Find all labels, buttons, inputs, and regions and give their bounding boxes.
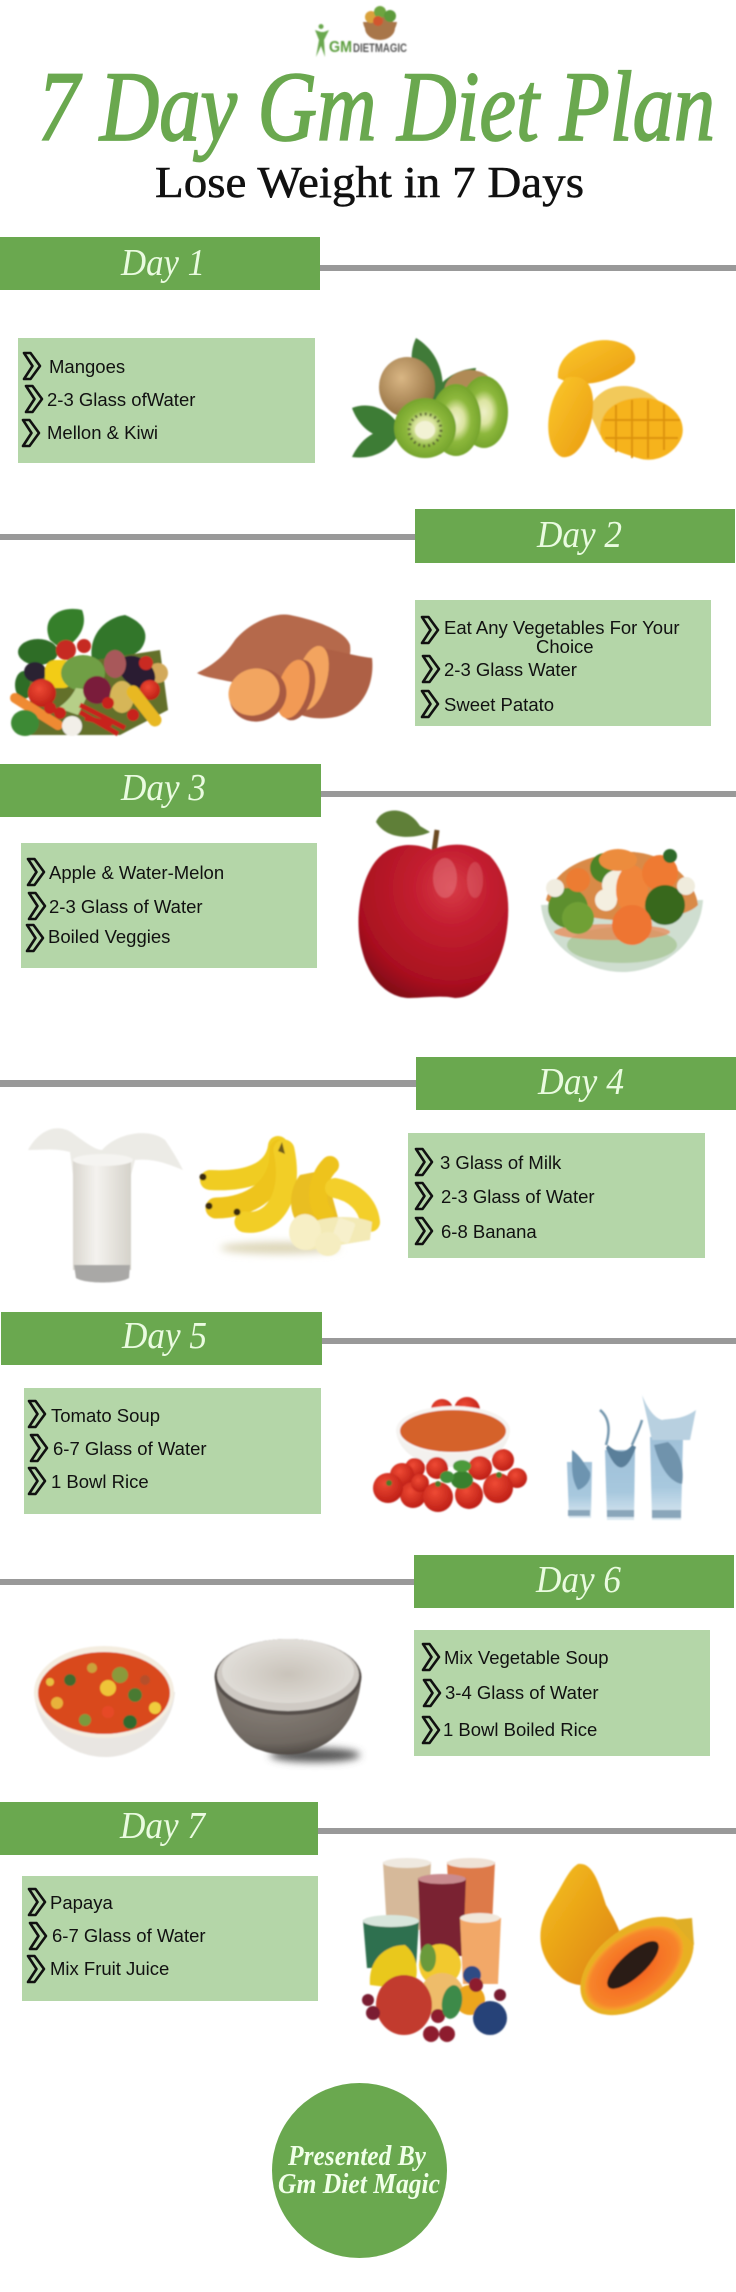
- icon: vegetable soup: [34, 1646, 175, 1757]
- panel: day 7 list: Mix Fruit Juice: [50, 1958, 169, 1979]
- section: day 4: [0, 1057, 736, 1282]
- panel: day 1 list: Mellon & Kiwi: [47, 422, 158, 443]
- day 6 banner: Day 6: [535, 1559, 621, 1601]
- logo wordmark: GM: [329, 39, 352, 56]
- logo: [315, 6, 407, 57]
- subtitle: Lose Weight in 7 Days: [155, 158, 584, 207]
- panel: day 5 list: [24, 1388, 321, 1514]
- icon: apple: [358, 810, 508, 998]
- day 4 banner: [416, 1057, 736, 1110]
- divider line: [320, 791, 736, 797]
- panel: day 3 list: Apple & Water-Melon: [49, 862, 224, 883]
- icon: bananas: [200, 1142, 372, 1256]
- panel: day 5 list: 1 Bowl Rice: [51, 1471, 149, 1492]
- day 2 banner: Day 2: [536, 514, 622, 556]
- icon: rice bowl: [214, 1639, 362, 1762]
- panel: day 4 list: 6-8 Banana: [441, 1221, 537, 1242]
- icon: vegetables: [11, 609, 168, 736]
- panel: day 6 list: 3-4 Glass of Water: [445, 1682, 599, 1703]
- panel: day 4 list: 3 Glass of Milk: [440, 1152, 562, 1173]
- section: day 5: [1, 1312, 736, 1520]
- icon: tomato soup: [373, 1397, 527, 1512]
- divider line: [320, 265, 736, 271]
- panel: day 3 list: [21, 843, 317, 968]
- closing badge: [272, 2083, 447, 2258]
- icon: milk glass: [28, 1128, 183, 1282]
- icon: sweet potato: [197, 614, 372, 731]
- divider line: [0, 1080, 416, 1087]
- icon: fruit basket: [363, 6, 397, 40]
- icon: papaya: [540, 1864, 712, 2035]
- panel: day 1 list: [18, 338, 315, 463]
- day 1 banner: [0, 237, 320, 290]
- panel: day 7 list: [22, 1876, 318, 2001]
- panel: day 2 list: [415, 600, 711, 726]
- badge text: Presented By: [287, 2141, 427, 2172]
- panel: day 3 list: Boiled Veggies: [48, 926, 170, 947]
- panel: day 5 list: 6-7 Glass of Water: [53, 1438, 207, 1459]
- badge text: Gm Diet Magic: [278, 2169, 441, 2200]
- icon: vegetable bowl: [541, 849, 703, 972]
- day 5 banner: Day 5: [121, 1315, 207, 1357]
- logo wordmark: [329, 39, 407, 56]
- divider line: [0, 534, 415, 540]
- panel: day 3 list: 2-3 Glass of Water: [49, 896, 203, 917]
- day 6 banner: [414, 1555, 734, 1608]
- panel: day 4 list: 2-3 Glass of Water: [441, 1186, 595, 1207]
- section: day 7: [0, 1802, 736, 2042]
- panel: day 4 list: [408, 1133, 705, 1258]
- section: day 3: [0, 764, 736, 998]
- day 3 banner: Day 3: [120, 767, 206, 809]
- section: day 1: [0, 237, 736, 463]
- section: day 6: [0, 1555, 734, 1762]
- section: day 2: [0, 509, 735, 736]
- panel: day 6 list: [414, 1630, 710, 1756]
- panel: day 5 list: Tomato Soup: [51, 1405, 160, 1426]
- panel: day 7 list: Papaya: [50, 1892, 113, 1913]
- panel: day 2 list: 2-3 Glass Water: [444, 659, 577, 680]
- panel: day 6 list: 1 Bowl Boiled Rice: [443, 1719, 597, 1740]
- day 2 banner: [415, 509, 735, 563]
- logo wordmark: DIETMAGIC: [353, 41, 407, 55]
- panel: day 2 list: Eat Any Vegetables For Your: [444, 617, 680, 638]
- panel: day 6 list: Mix Vegetable Soup: [444, 1647, 609, 1668]
- day 7 banner: [0, 1802, 318, 1855]
- icon: juice and fruit: [362, 1858, 507, 2042]
- panel: day 2 list: Sweet Patato: [444, 694, 554, 715]
- panel: day 2 list: Choice: [536, 636, 594, 657]
- icon: mango: [548, 340, 683, 460]
- divider line: [0, 1579, 414, 1585]
- day 7 banner: Day 7: [119, 1805, 207, 1847]
- icon: person: [315, 24, 329, 57]
- panel: day 7 list: 6-7 Glass of Water: [52, 1925, 206, 1946]
- divider line: [321, 1338, 736, 1344]
- day 5 banner: [1, 1312, 322, 1365]
- day 4 banner: Day 4: [537, 1061, 624, 1103]
- divider line: [318, 1828, 736, 1834]
- day 3 banner: [0, 764, 321, 817]
- panel: day 1 list: Mangoes: [49, 356, 125, 377]
- icon: water glasses: [567, 1395, 696, 1520]
- icon: kiwi: [352, 338, 508, 458]
- badge text: [278, 2141, 441, 2200]
- panel: day 1 list: 2-3 Glass ofWater: [47, 389, 195, 410]
- day 1 banner: Day 1: [120, 242, 205, 284]
